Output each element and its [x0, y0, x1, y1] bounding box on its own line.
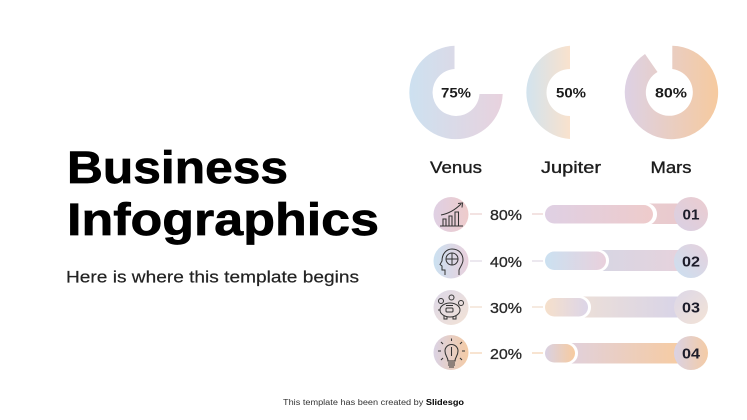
row 4: 20%: [434, 335, 708, 370]
percentage: 40%: [490, 255, 522, 271]
badge: [674, 290, 708, 324]
bar: [543, 250, 685, 272]
donut chart: Jupiter 50%: [526, 46, 602, 177]
row 1: 80%: [434, 197, 708, 232]
title: Infographics: [67, 194, 379, 245]
percentage: 30%: [490, 301, 522, 317]
badge: [674, 244, 708, 278]
footer credit: This template has been created by Slidesgo: [283, 398, 464, 407]
badge: 01: [682, 206, 700, 224]
donut chart: Venus 75%: 75%: [441, 84, 472, 100]
connector: [470, 306, 545, 308]
badge: 02: [682, 254, 700, 270]
bar: [543, 342, 685, 364]
connector: [470, 213, 545, 215]
bar: [543, 296, 685, 318]
connector: [470, 352, 545, 354]
bar: [543, 203, 685, 226]
icon: light bulb: [434, 335, 468, 370]
badge: [674, 336, 708, 370]
title: Business: [67, 142, 288, 193]
title: [67, 142, 379, 245]
badge: [674, 197, 708, 231]
donut chart: Venus 75%: Venus: [430, 159, 482, 177]
connector: [470, 260, 545, 262]
donut chart: Venus 75%: [409, 46, 503, 177]
donut chart: Jupiter 50%: 50%: [556, 84, 587, 100]
percentage: 80%: [490, 208, 522, 224]
percentage: 20%: [490, 347, 522, 363]
row 2: 40%: [434, 244, 708, 278]
badge: 03: [682, 300, 700, 316]
donut chart: Mars 80%: 80%: [655, 84, 688, 100]
icon: growth chart: [434, 197, 468, 232]
icon: piggy bank with coins: [434, 290, 468, 325]
donut chart: Mars 80%: Mars: [650, 159, 692, 177]
donut chart: Mars 80%: [625, 46, 718, 177]
icon: head with globe: [434, 244, 468, 278]
badge: 04: [682, 346, 701, 362]
subtitle: Here is where this template begins: [66, 268, 359, 286]
row 3: 30%: [434, 290, 708, 325]
donut chart: Jupiter 50%: Jupiter: [541, 159, 602, 177]
